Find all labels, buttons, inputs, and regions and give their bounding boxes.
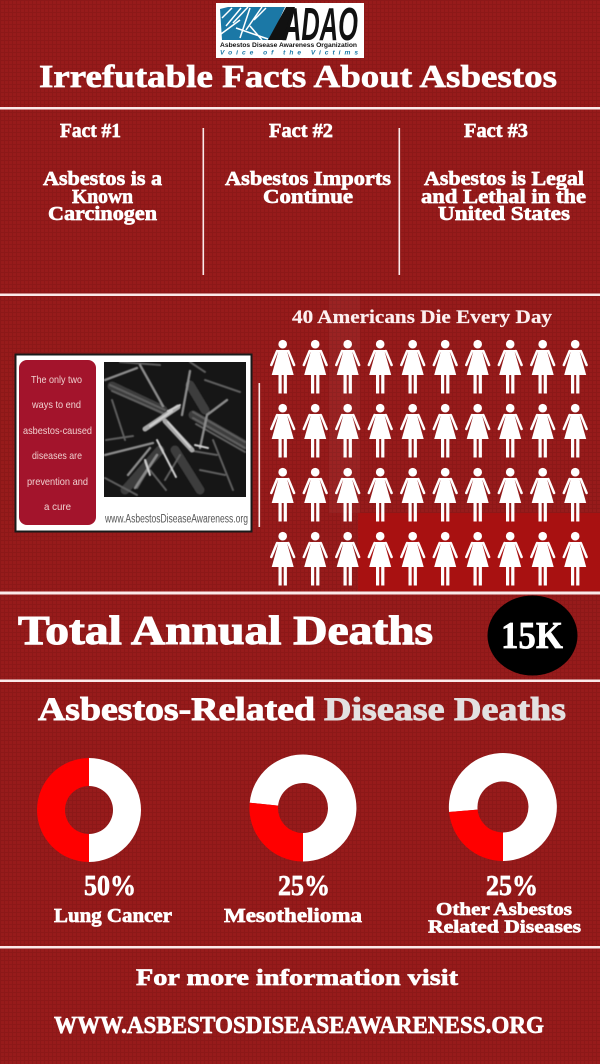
chart: lung cancer 50%: [37, 758, 172, 927]
fact 3: Fact #3: [464, 120, 528, 142]
chart: lung cancer 50%: Lung Cancer: [54, 906, 172, 927]
heading: disease deaths: [38, 692, 566, 728]
fact 1: [43, 120, 162, 225]
logo: ADAO: Asbestos Disease Awareness Organization: [220, 42, 357, 49]
fact 3: and Lethal in the: [421, 186, 586, 208]
callout: only two ways: asbestos-caused: [23, 425, 92, 437]
chart: other diseases 25%: Related Diseases: [428, 916, 581, 936]
title: Irrefutable Facts About Asbestos: [39, 58, 557, 94]
fact 1: Asbestos is a: [43, 168, 162, 190]
photo: asbestos fibers: [104, 362, 246, 497]
fact 2: [225, 120, 391, 208]
logo: ADAO: Voice of the Victims: [220, 50, 358, 56]
chart: mesothelioma 25%: [224, 754, 362, 927]
fact 2: Asbestos Imports: [225, 168, 391, 190]
footer: more information: For more information visit: [136, 965, 458, 990]
chart: other diseases 25%: 25%: [486, 871, 538, 902]
footer: more information: WWW.ASBESTOSDISEASEAWARENESS.ORG: [54, 1013, 544, 1039]
website caption: www.AsbestosDiseaseAwareness.org: [104, 514, 248, 526]
fact 1: Known: [72, 186, 133, 208]
badge: 15K: 15K: [501, 615, 563, 657]
callout: only two ways: ways to end: [31, 399, 81, 411]
chart: lung cancer 50%: 50%: [84, 871, 136, 902]
panel: asbestos photo card: [16, 354, 252, 532]
chart: mesothelioma 25%: 25%: [278, 871, 330, 902]
fact 3: [421, 120, 586, 225]
heading: total annual deaths: Total Annual Deaths: [18, 607, 433, 653]
callout: only two ways: diseases are: [32, 450, 82, 462]
fact 1: Carcinogen: [48, 203, 157, 225]
callout: only two ways: a cure: [44, 501, 71, 513]
heading: disease deaths: Disease Deaths: [324, 692, 566, 728]
chart: other diseases 25%: [428, 753, 581, 936]
footer: more information: [54, 965, 544, 1039]
panel: three facts: [43, 120, 586, 275]
fact 2: Fact #2: [269, 120, 333, 142]
callout: only two ways: prevention and: [27, 476, 88, 488]
logo: ADAO: [216, 0, 364, 58]
chart: other diseases 25%: Other Asbestos: [436, 899, 572, 919]
fact 2: Continue: [263, 186, 353, 208]
chart: mesothelioma 25%: Mesothelioma: [224, 906, 362, 927]
badge: 15K: [488, 596, 578, 676]
fact 1: Fact #1: [60, 120, 121, 142]
callout: only two ways: The only two: [31, 374, 82, 386]
heading: disease deaths: Asbestos-Related: [38, 692, 315, 728]
callout: only two ways: [19, 360, 96, 525]
fact 3: Asbestos is Legal: [424, 168, 584, 190]
heading: 40 Americans: 40 Americans Die Every Day: [292, 307, 553, 328]
fact 3: United States: [438, 203, 570, 225]
pictogram: 40 people: [271, 340, 587, 586]
